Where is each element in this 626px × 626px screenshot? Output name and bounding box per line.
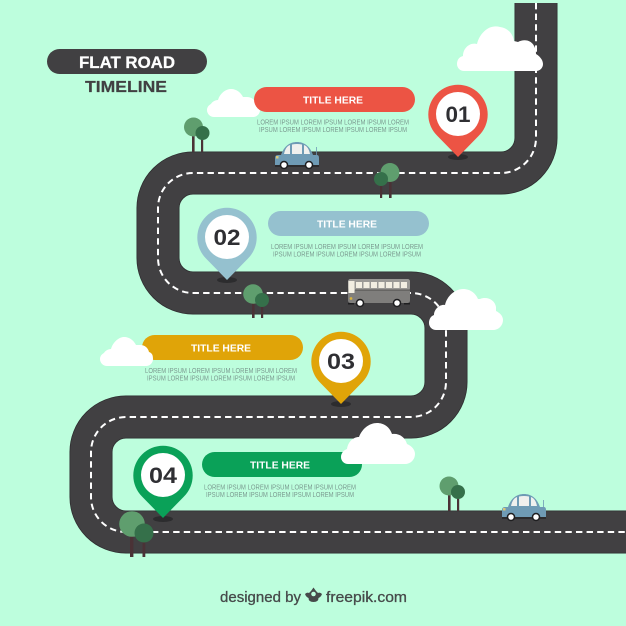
text: description 01 [257, 120, 409, 134]
cloud: right of middle road [429, 289, 503, 330]
pill: title 02 [268, 211, 429, 236]
text: description 03: IPSUM LOREM IPSUM LOREM IPSUM LOREM IPSUM [147, 376, 295, 382]
car: lower road [502, 494, 546, 520]
pill: title 02: TITLE HERE [317, 218, 377, 230]
pin 03: 03 [327, 349, 355, 374]
icon: freepik logo [305, 588, 322, 602]
pin 04: 04 [149, 463, 178, 488]
title pill: FLAT ROAD [47, 49, 207, 74]
tree: right lower [440, 476, 465, 511]
tree: lower left corner [119, 511, 154, 557]
text: description 02: IPSUM LOREM IPSUM LOREM IPSUM LOREM IPSUM [273, 252, 421, 258]
winding road [91, 3, 626, 532]
cloud: beside title 01 [207, 89, 260, 117]
pin 02 [197, 208, 257, 283]
bus [348, 279, 410, 306]
pin 01 [428, 85, 488, 160]
step 04 [133, 446, 362, 522]
tree: top left [184, 118, 210, 152]
text: description 04 [204, 484, 356, 499]
cloud: top right [457, 26, 543, 71]
pill: title 01 [254, 87, 415, 112]
text: description 01: LOREM IPSUM LOREM IPSUM LOREM IPSUM LOREM [257, 120, 409, 126]
cloud: left of title 03 [100, 337, 153, 366]
text: description 02 [271, 244, 423, 258]
title pill: FLAT ROAD: FLAT ROAD [79, 53, 175, 72]
tree: on upper road [374, 163, 400, 198]
text: description 02: LOREM IPSUM LOREM IPSUM LOREM IPSUM LOREM [271, 244, 423, 251]
car: upper road [275, 142, 319, 168]
text: description 04: LOREM IPSUM LOREM IPSUM LOREM IPSUM LOREM [204, 484, 356, 492]
text: description 03 [145, 368, 297, 382]
step 02 [197, 208, 429, 283]
footer: designed by freepik.com [220, 588, 407, 606]
text: description 03: LOREM IPSUM LOREM IPSUM LOREM IPSUM LOREM [145, 368, 297, 375]
cloud: lower centre [341, 423, 415, 464]
pin 01: 01 [446, 102, 470, 127]
text: description 04: IPSUM LOREM IPSUM LOREM IPSUM LOREM IPSUM [206, 492, 354, 499]
subtitle: TIMELINE: TIMELINE [85, 79, 167, 96]
pin 04 [133, 446, 193, 522]
pin 03 [311, 332, 371, 407]
pill: title 03 [142, 335, 303, 360]
step 01 [254, 85, 488, 160]
pill: title 04 [202, 452, 362, 477]
tree: on middle road [243, 284, 269, 318]
pill: title 03: TITLE HERE [191, 342, 251, 354]
footer: designed by freepik.com: freepik.com [326, 590, 407, 606]
pill: title 01: TITLE HERE [303, 94, 363, 106]
footer: designed by freepik.com: designed by [220, 590, 302, 606]
pin 02: 02 [214, 225, 240, 250]
pill: title 04: TITLE HERE [250, 460, 310, 472]
step 03 [142, 332, 371, 407]
text: description 01: IPSUM LOREM IPSUM LOREM IPSUM LOREM IPSUM [259, 127, 407, 134]
